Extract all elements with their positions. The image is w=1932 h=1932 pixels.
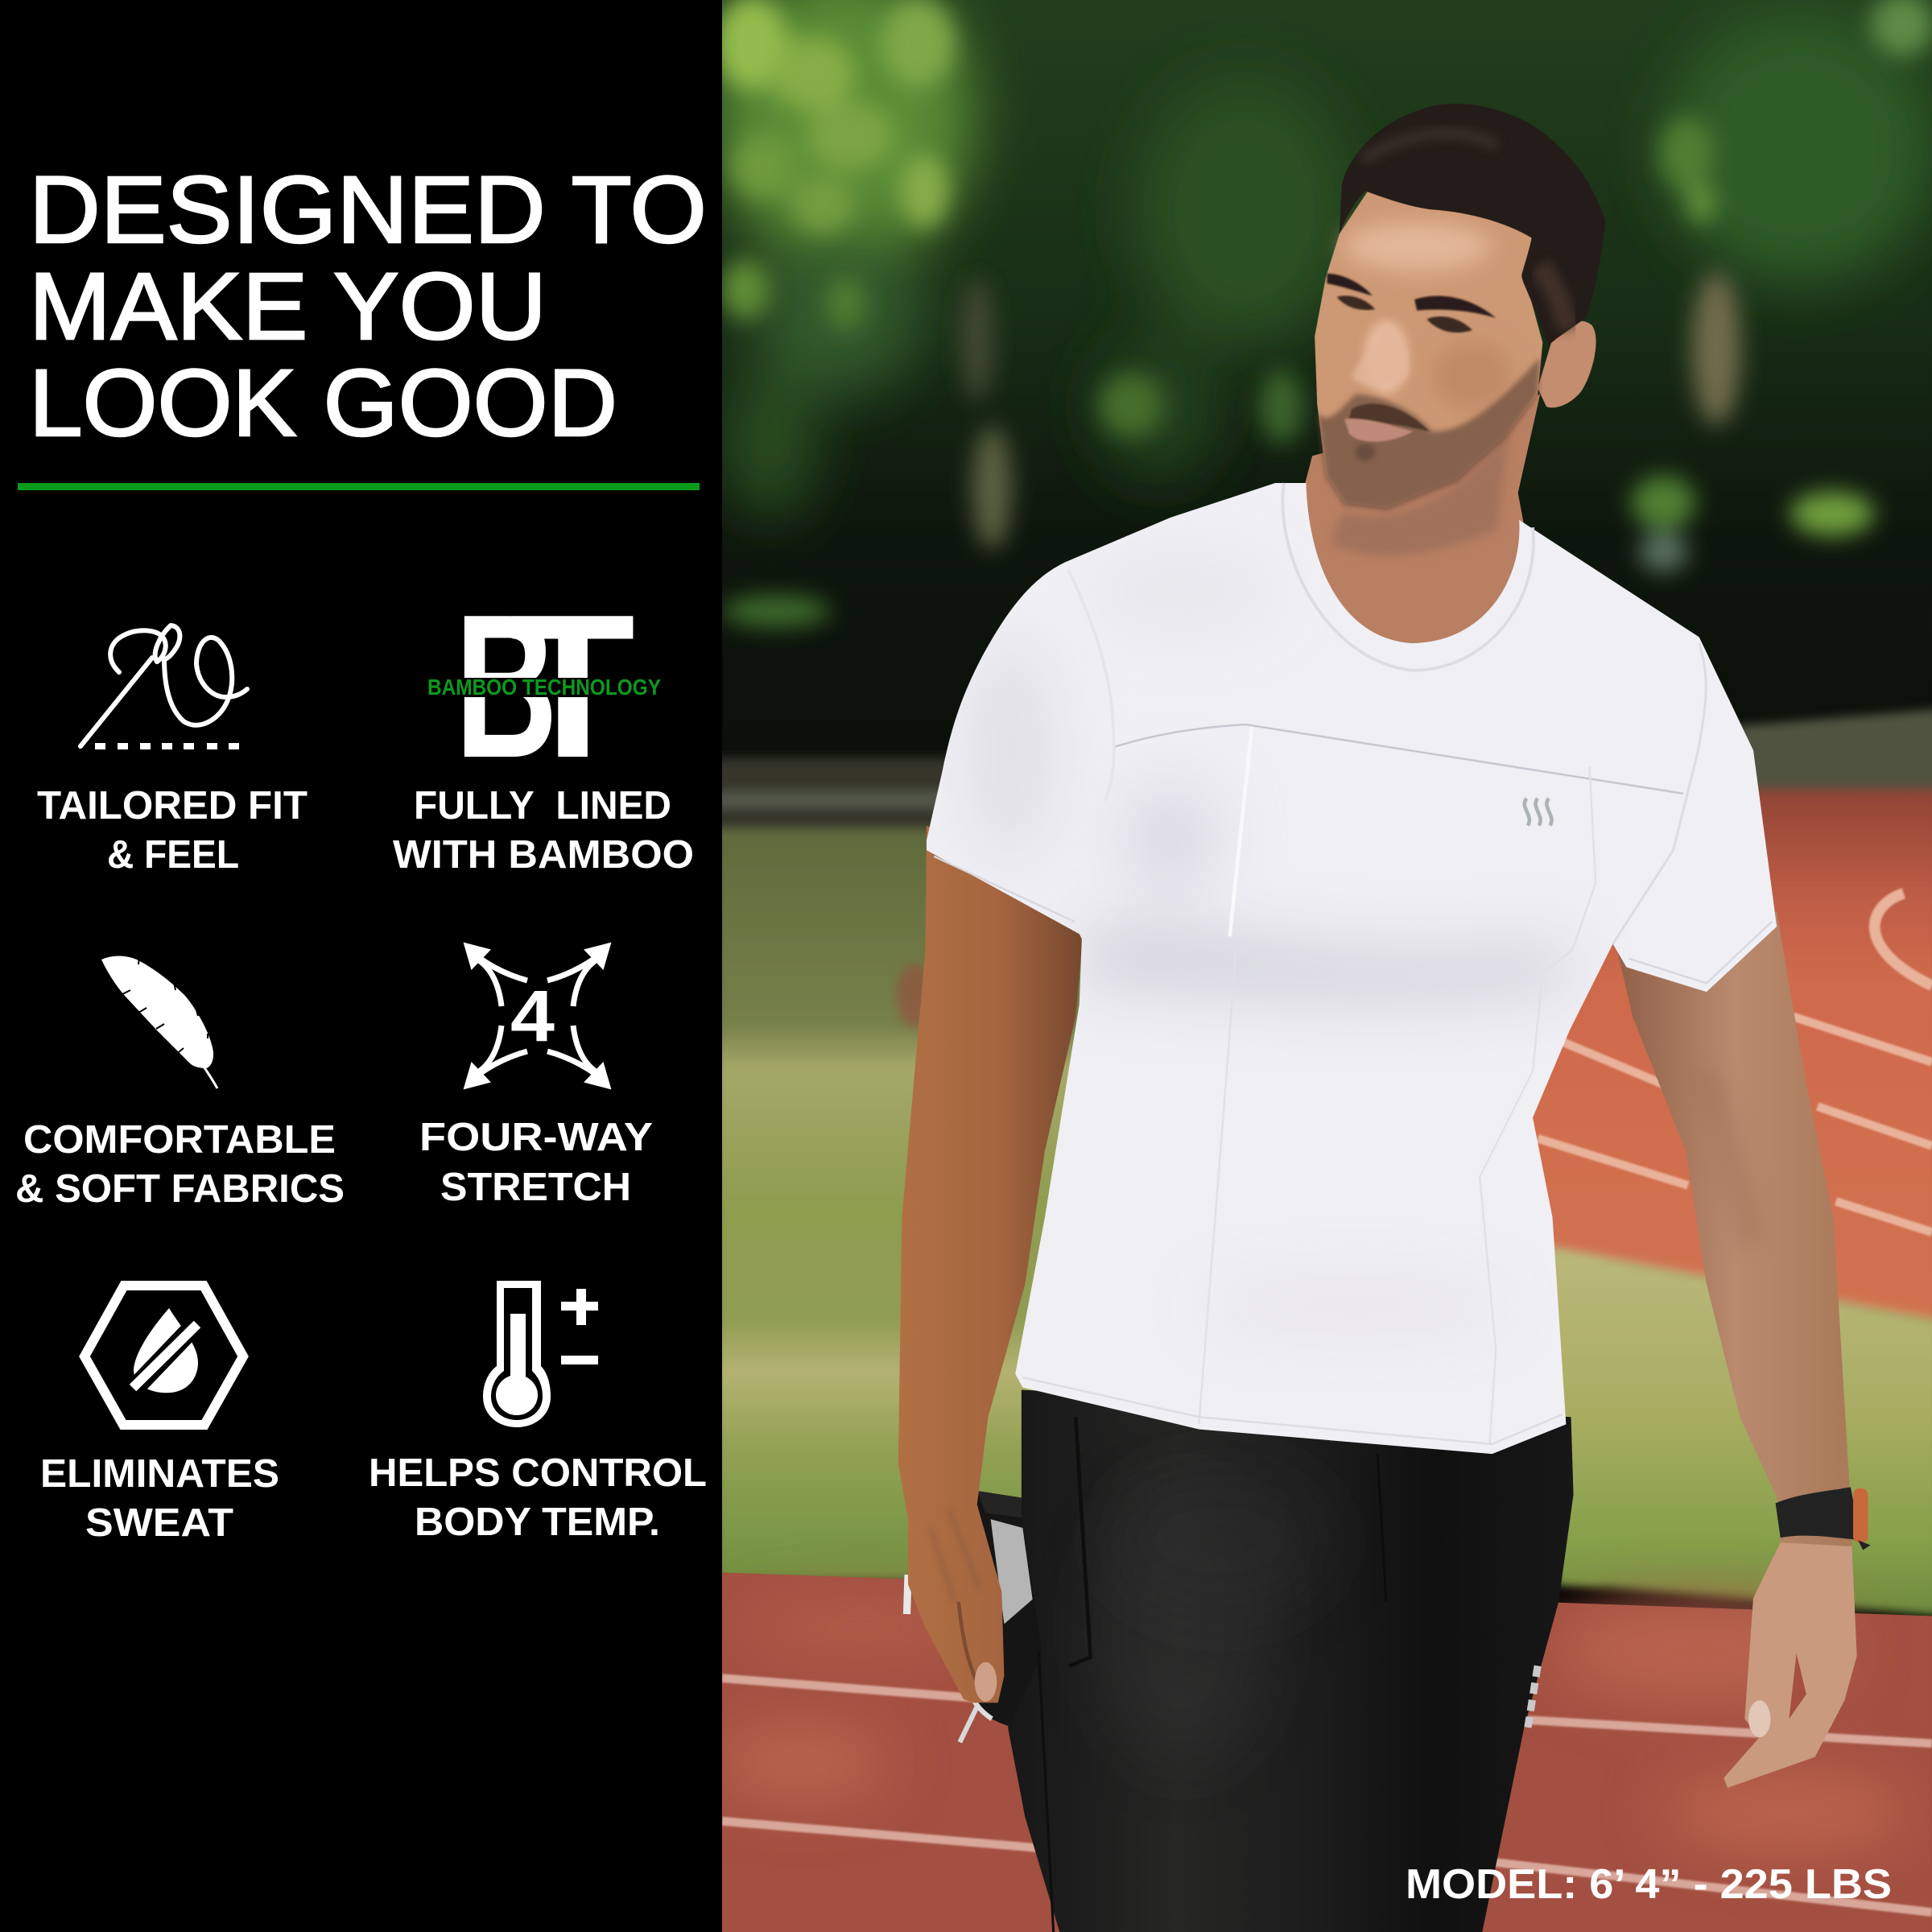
far path (715, 708, 1932, 844)
near track (715, 1572, 1932, 1932)
model caption: MODEL: 6’ 4” - 225 LBS (1406, 1861, 1892, 1908)
title: DESIGNED TO (29, 157, 707, 263)
lips (1344, 419, 1414, 442)
shirt (927, 483, 1777, 1454)
title: LOOK GOOD (29, 350, 617, 456)
label: four way (419, 1116, 653, 1209)
label: comfortable (15, 1118, 345, 1211)
icon: BT bamboo technology: T (510, 572, 635, 800)
feature: body temperature (369, 1281, 707, 1544)
label: four way: STRETCH (440, 1166, 631, 1209)
eyebrows (1327, 274, 1373, 295)
label: fully lined (393, 784, 694, 877)
nose (1352, 323, 1409, 386)
label: helps control: HELPS CONTROL (369, 1451, 707, 1495)
left black panel (0, 0, 722, 1932)
green divider (18, 483, 700, 490)
label: tailored fit: TAILORED FIT (37, 784, 308, 828)
icon: BT bamboo technology: B (455, 572, 558, 800)
label: tailored fit: & FEEL (107, 833, 239, 877)
photo panel: model on running track (715, 0, 1932, 1932)
icon: BT bamboo technology: BAMBOO TECHNOLOGY (427, 675, 661, 700)
grass right (1528, 1242, 1932, 1616)
feature: bamboo lining (393, 572, 694, 877)
feature: comfortable (15, 956, 345, 1211)
far track section (1516, 789, 1932, 1331)
hair (1340, 104, 1605, 345)
title (29, 157, 707, 456)
shirt logo (1525, 799, 1551, 826)
label: fully lined: FULLY LINED (414, 784, 671, 828)
head (1315, 104, 1605, 510)
beard (1317, 357, 1540, 510)
eyes (1337, 295, 1375, 310)
icon: thermometer (483, 1281, 598, 1427)
trousers (1008, 1390, 1574, 1932)
watch (1776, 1487, 1870, 1550)
label: eliminates (40, 1452, 279, 1545)
red marker in far grass (897, 964, 931, 1028)
title: MAKE YOU (29, 254, 547, 360)
feature: four way stretch (419, 943, 653, 1209)
trees background (715, 0, 1932, 789)
icon: hexagon water drop (85, 1286, 243, 1425)
icon: BT bamboo technology (427, 572, 661, 800)
label: comfortable: & SOFT FABRICS (15, 1167, 345, 1211)
ear (1538, 321, 1596, 407)
icon: needle and thread (80, 625, 247, 749)
neck (1296, 394, 1540, 659)
label: fully lined: WITH BAMBOO (393, 833, 694, 877)
icon: four way arrows (464, 943, 610, 1088)
left arm and hand (898, 826, 1084, 1703)
man (898, 104, 1870, 1932)
grass left (715, 828, 1602, 1582)
right arm and hand (1614, 912, 1857, 1788)
feature: tailored fit (37, 625, 308, 877)
feature: eliminates sweat (40, 1286, 279, 1545)
label: comfortable: COMFORTABLE (23, 1118, 336, 1162)
label: helps control (369, 1451, 707, 1544)
label: helps control: BODY TEMP. (415, 1501, 660, 1544)
icon: feather (101, 956, 217, 1088)
label: four way: FOUR-WAY (419, 1116, 653, 1159)
label: eliminates: ELIMINATES (40, 1452, 279, 1496)
icon: four way arrows: 4 (510, 976, 555, 1057)
label: tailored fit (37, 784, 308, 877)
face (1315, 172, 1542, 508)
shoe held in hand (907, 1491, 1045, 1742)
label: eliminates: SWEAT (85, 1501, 233, 1545)
